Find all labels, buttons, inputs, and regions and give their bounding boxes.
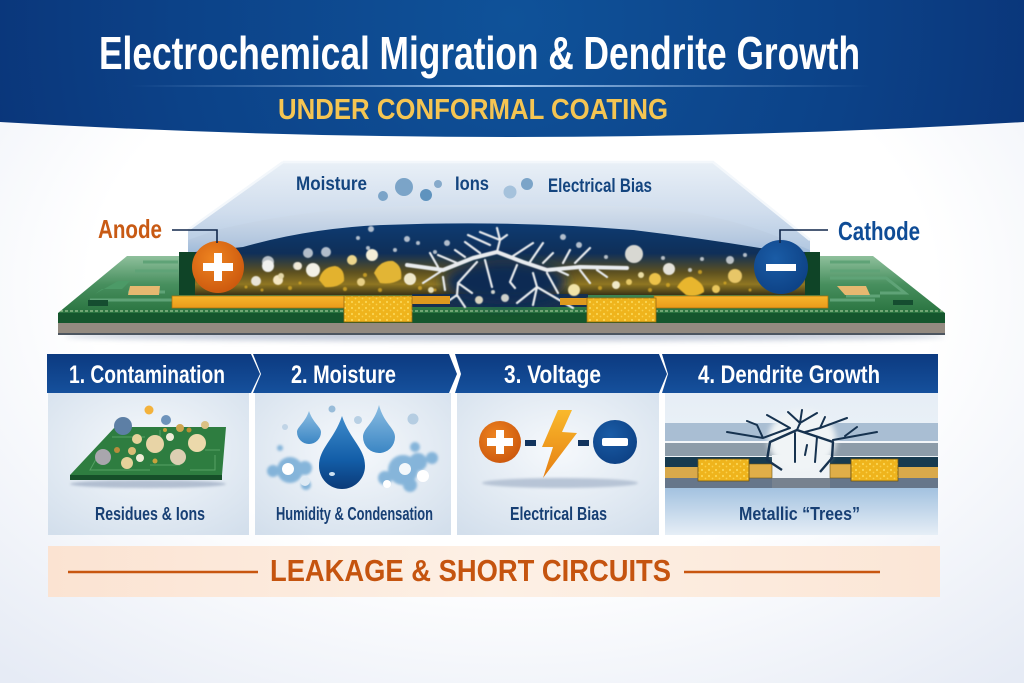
label: electrical bias: Electrical Bias — [548, 176, 652, 197]
label: ions: Ions — [455, 174, 489, 195]
header tab 1: 1. Contamination — [69, 361, 225, 389]
particles and residues — [244, 226, 752, 304]
header banner — [0, 0, 1024, 137]
header tab 2 — [253, 354, 457, 393]
PCB board — [58, 256, 945, 335]
header tab 3: 3. Voltage — [504, 361, 601, 389]
subtitle: UNDER CONFORMAL COATING — [278, 94, 668, 126]
cross-section diagram — [58, 162, 945, 341]
metal trace — [172, 296, 828, 322]
anode terminal — [192, 241, 244, 293]
panel 2: moisture — [253, 354, 457, 535]
caption 3: Electrical Bias — [510, 504, 607, 524]
panel 3: voltage — [455, 354, 667, 535]
icon: voltage symbols — [479, 410, 638, 488]
caption 4: Metallic “Trees” — [739, 504, 860, 524]
ion dots — [378, 178, 533, 201]
header tab 1 — [47, 354, 260, 393]
label: moisture: Moisture — [296, 174, 367, 195]
board shadow — [65, 331, 945, 341]
header tab 4: 4. Dendrite Growth — [698, 361, 880, 389]
cathode terminal — [754, 240, 808, 294]
conformal coating — [188, 162, 810, 262]
header tab 4 — [662, 354, 938, 393]
label: cathode: Cathode — [838, 216, 920, 246]
panel 4: dendrite growth — [662, 354, 938, 535]
banner: leakage and short circuits: LEAKAGE & SHORT CIRCUITS — [270, 553, 671, 588]
base block and dark chamber — [179, 223, 820, 307]
icon: contaminated board — [70, 406, 226, 488]
anode leader — [172, 230, 217, 243]
panel 1: contamination — [47, 354, 260, 535]
header tab 3 — [455, 354, 667, 393]
header tab 2: 2. Moisture — [291, 361, 396, 389]
illustration: layers and metallic trees — [665, 410, 938, 535]
caption 2: Humidity & Condensation — [276, 504, 433, 524]
dendrite — [407, 228, 627, 308]
banner: leakage and short circuits — [48, 546, 940, 597]
icon: water drops — [267, 405, 438, 492]
caption 1: Residues & Ions — [95, 504, 205, 524]
label: anode: Anode — [98, 214, 162, 244]
cathode leader — [780, 230, 828, 243]
